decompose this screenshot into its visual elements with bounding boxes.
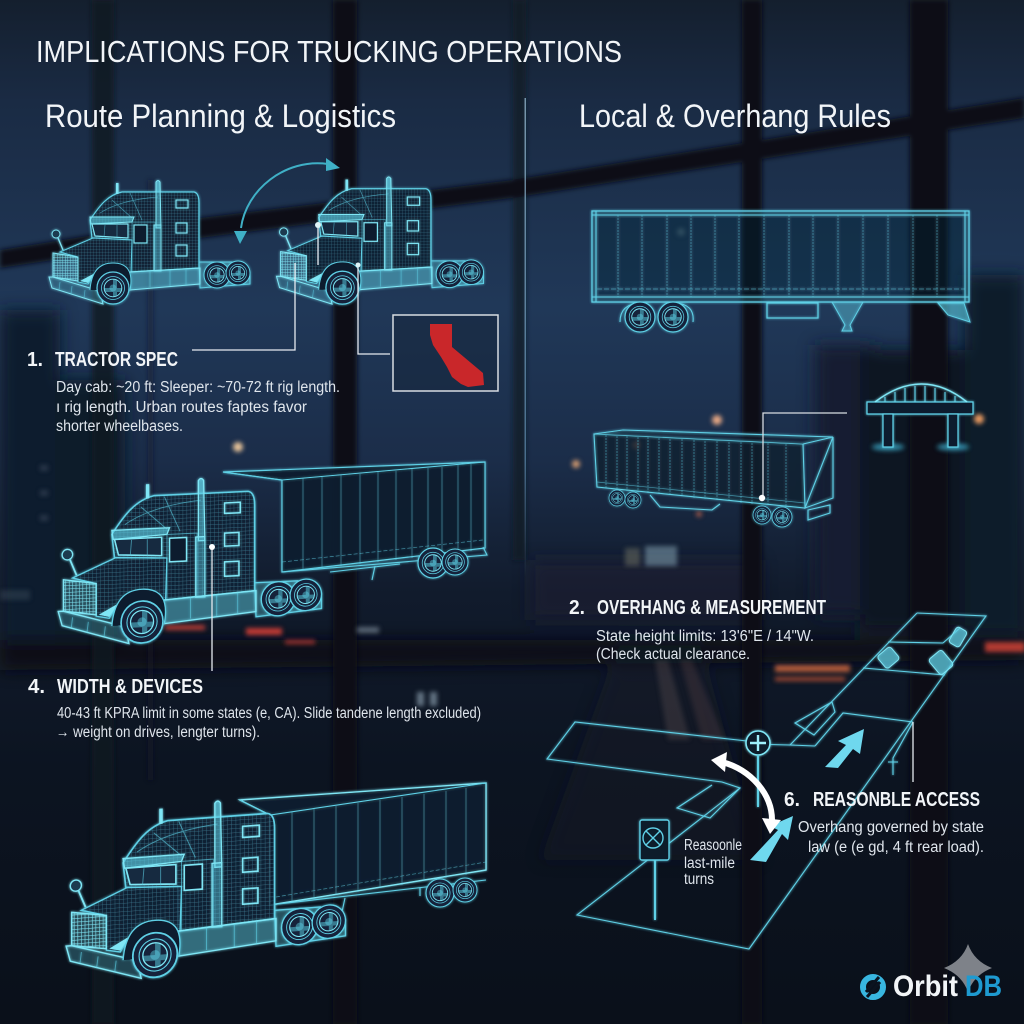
truck: day cab tractor xyxy=(49,180,250,304)
text: reasonable access: REASONBLE ACCESS xyxy=(813,789,980,811)
text: overhang and measurement: (Check actual clearance. xyxy=(596,646,750,663)
logo: Orbit DB: DB xyxy=(965,970,1002,1003)
leader line: width and devices xyxy=(209,544,215,671)
truck wheels on road xyxy=(863,626,968,676)
text: tractor spec: ı rig length. Urban routes faptes favor xyxy=(56,399,307,416)
text: last-mile turns note xyxy=(684,837,742,888)
heading: local rules: Local & Overhang Rules xyxy=(579,98,891,134)
text: width and devices: 4. xyxy=(28,676,45,698)
text: tractor spec: Day cab: ~20 ft: Sleeper: ~70-72 ft rig length. xyxy=(56,379,340,396)
heading: route planning: Route Planning & Logistics xyxy=(45,98,396,134)
text: width and devices: WIDTH & DEVICES xyxy=(57,676,203,698)
text: width and devices: 40-43 ft KPRA limit in some states (e, CA). Slide tandene length excluded) xyxy=(57,705,481,722)
sparkle xyxy=(944,944,992,992)
text: last-mile turns note: turns xyxy=(684,871,714,888)
trailer: side elevation xyxy=(592,211,970,332)
text: reasonable access: law (e (e ɡd, 4 ft rear load). xyxy=(808,839,984,856)
arrow: road direction upper xyxy=(825,729,864,768)
text: last-mile turns note: Reasoonle xyxy=(684,837,742,854)
text: overhang and measurement xyxy=(569,597,826,663)
trailer xyxy=(240,783,486,912)
logo: Orbit DB xyxy=(863,944,1002,1003)
arrow: white turning arrow xyxy=(711,752,781,834)
text: width and devices xyxy=(28,676,481,741)
truck: tractor with trailer, width and devices xyxy=(58,462,487,647)
icon: low clearance bridge xyxy=(867,384,973,450)
text: overhang and measurement: 2. xyxy=(569,597,585,619)
cross marker xyxy=(746,731,770,807)
logo: Orbit DB: Orbit xyxy=(893,970,958,1003)
map: California xyxy=(393,315,498,391)
column divider xyxy=(524,98,526,578)
text: tractor spec xyxy=(27,349,340,435)
leader line: trailer to bridge xyxy=(759,413,847,501)
text: reasonable access: 6. xyxy=(784,789,800,811)
text: overhang and measurement: OVERHANG & MEASUREMENT xyxy=(597,597,826,619)
text: tractor spec: shorter wheelbases. xyxy=(56,418,183,435)
text: reasonable access: Overhang governed by state xyxy=(798,819,984,836)
text: tractor spec: 1. xyxy=(27,349,43,371)
text: width and devices: → weight on drives, lengter turns). xyxy=(56,724,260,741)
truck: lower tractor with trailer xyxy=(66,783,486,984)
text: last-mile turns note: last-mile xyxy=(684,855,735,872)
truck: sleeper tractor xyxy=(276,177,484,304)
trailer xyxy=(223,462,487,580)
trailer: perspective xyxy=(594,430,833,527)
arrow: swap between tractors xyxy=(234,158,340,244)
arrow: road direction lower xyxy=(750,816,793,862)
leader line: reasonable access xyxy=(912,722,914,782)
title: IMPLICATIONS FOR TRUCKING OPERATIONS xyxy=(36,34,622,69)
road diagram: last-mile turn xyxy=(547,613,986,949)
leader lines from tractor xyxy=(192,222,390,354)
text: tractor spec: TRACTOR SPEC xyxy=(55,349,178,371)
logo swirl icon xyxy=(863,977,883,997)
text: overhang and measurement: State height limits: 13'6"E / 14"W. xyxy=(596,628,814,645)
road sign xyxy=(640,820,669,920)
text: reasonable access xyxy=(784,789,984,856)
